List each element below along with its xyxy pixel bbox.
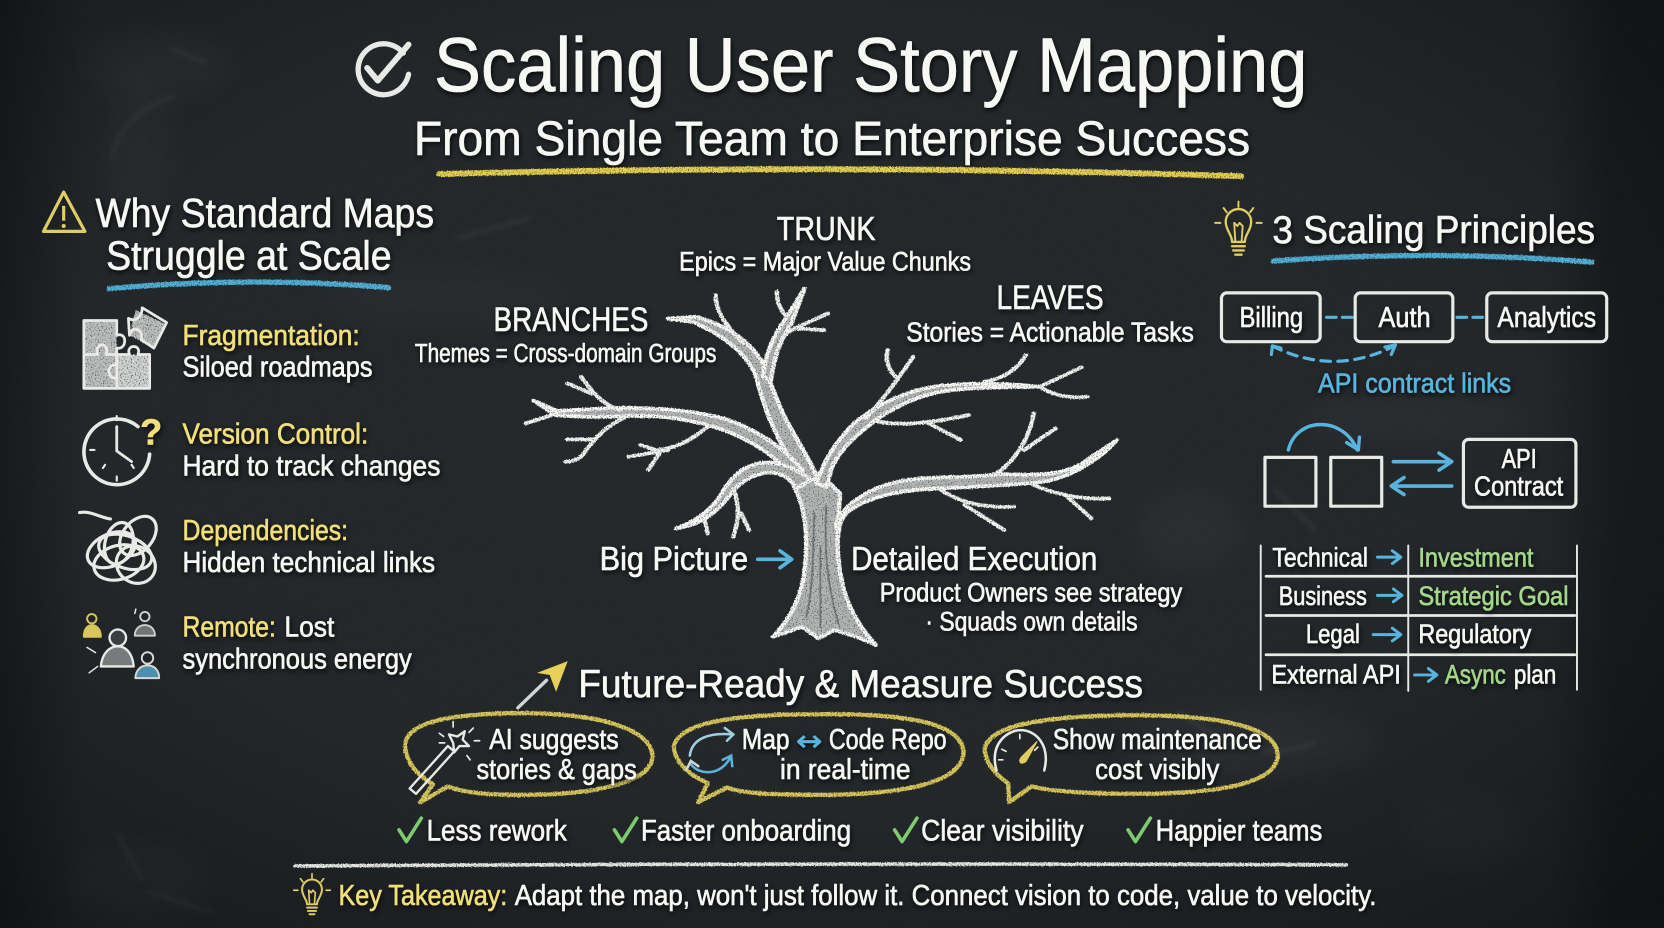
- text: version control: Version Control:: [183, 419, 368, 451]
- panel: why standard maps struggle: [44, 190, 440, 678]
- panel: 3 scaling principles: [1215, 202, 1607, 691]
- mapping table: [1261, 543, 1577, 691]
- title underline: [439, 169, 1242, 176]
- box: api contract: Contract: [1474, 471, 1563, 502]
- text: dependencies: [183, 515, 435, 579]
- panel: future-ready and measure success: [399, 661, 1322, 847]
- label: big picture: Big Picture: [600, 540, 748, 577]
- box: api contract: [1463, 439, 1576, 507]
- text: version control: Hard to track changes: [183, 450, 440, 482]
- text: remote: synchronous energy: [183, 644, 412, 676]
- row: technical: [1272, 543, 1534, 573]
- label: detailed execution: · Squads own details: [925, 606, 1138, 636]
- box: billing: Billing: [1240, 302, 1303, 334]
- label: trunk: [679, 210, 971, 277]
- label: leaves: [906, 279, 1194, 348]
- title block: [358, 22, 1307, 176]
- label: leaves: Stories = Actionable Tasks: [906, 317, 1194, 348]
- icon: clock with question mark: ?: [140, 412, 162, 453]
- callout: maintenance cost: [985, 715, 1278, 802]
- icon: puzzle pieces: [84, 308, 167, 388]
- text: fragmentation: Siloed roadmaps: [183, 352, 372, 384]
- callout: maintenance cost: Show maintenance: [1053, 724, 1262, 756]
- section heading: Why Standard Maps: [96, 190, 434, 236]
- row: legal: Legal: [1306, 619, 1360, 649]
- icon: light bulb: [294, 874, 330, 914]
- arrow: big picture to trunk: [758, 551, 792, 568]
- row: external api: plan: [1514, 659, 1556, 689]
- callout: ai suggests: stories & gaps: [476, 754, 637, 786]
- row: technical: Investment: [1418, 543, 1534, 573]
- icon: gauge: [995, 730, 1046, 770]
- label: detailed execution: Product Owners see strategy: [880, 578, 1183, 608]
- text: remote: Lost: [284, 612, 334, 644]
- icon: remote people: [84, 609, 159, 678]
- box: auth: Auth: [1379, 302, 1431, 334]
- icon: tangled knot: [80, 509, 164, 591]
- text: remote: Remote:: [183, 612, 276, 644]
- row: technical: Technical: [1272, 543, 1368, 573]
- box: auth: [1355, 293, 1453, 342]
- box: analytics: [1487, 293, 1607, 342]
- label: api contract links: API contract links: [1318, 368, 1511, 399]
- box: billing: [1221, 293, 1320, 342]
- label: branches: Themes = Cross-domain Groups: [415, 340, 716, 368]
- dashed connectors: [1327, 316, 1484, 319]
- squares: [1265, 457, 1382, 506]
- heading: Future-Ready & Measure Success: [578, 662, 1143, 706]
- icon: warning triangle: [44, 192, 85, 231]
- label: branches: [415, 301, 716, 368]
- row: external api: Async: [1445, 659, 1506, 689]
- row: legal: Regulatory: [1418, 619, 1532, 649]
- icon: sync arrows: [687, 728, 733, 772]
- text: fragmentation: [183, 320, 372, 384]
- table grid: [1261, 545, 1577, 691]
- label: detailed execution: [851, 540, 1183, 636]
- title: Scaling User Story Mapping: [434, 22, 1307, 108]
- arrow: curved api link: [1271, 345, 1396, 361]
- panel: tree metaphor: [415, 210, 1194, 645]
- heading underline: [109, 282, 388, 289]
- heading underline: [1273, 255, 1592, 262]
- callout: map and code repo: Code Repo: [829, 724, 947, 756]
- text: remote: [183, 612, 412, 676]
- section heading: [96, 190, 434, 279]
- text: dependencies: Hidden technical links: [183, 547, 435, 579]
- callout: map and code repo: ↔: [796, 723, 822, 757]
- takeaway text: Adapt the map, won't just follow it. Connect vision to code, value to velocity.: [515, 880, 1376, 912]
- row: external api: External API: [1271, 659, 1401, 689]
- row: legal: [1306, 619, 1532, 649]
- callout: ai suggests: AI suggests: [489, 724, 619, 756]
- text: dependencies: Dependencies:: [183, 515, 348, 547]
- domain boxes: [1221, 293, 1607, 399]
- label: leaves: LEAVES: [996, 279, 1104, 317]
- icon: rising arrow: [518, 661, 568, 708]
- benefit: happier teams: Happier teams: [1156, 814, 1322, 847]
- box: api contract: API: [1502, 443, 1537, 474]
- callout: map and code repo: Map: [742, 724, 790, 756]
- row: business: Business: [1279, 581, 1367, 611]
- icon: light bulb: [1215, 202, 1262, 255]
- takeaway text: Key Takeaway:: [339, 880, 507, 912]
- api contract diagram: [1265, 424, 1576, 507]
- label: trunk: Epics = Major Value Chunks: [679, 247, 971, 277]
- benefit: faster onboarding: Faster onboarding: [641, 814, 851, 847]
- label: trunk: TRUNK: [777, 210, 876, 247]
- text: version control: [183, 419, 440, 482]
- subtitle: From Single Team to Enterprise Success: [414, 113, 1250, 166]
- arrow: to contract: [1393, 453, 1452, 470]
- row: external api: [1271, 659, 1556, 689]
- icon: check circle: [358, 44, 409, 95]
- arrow: curved loop: [1288, 424, 1359, 450]
- key takeaway: [294, 874, 1376, 914]
- section heading: Struggle at Scale: [106, 233, 392, 279]
- label: detailed execution: Detailed Execution: [851, 540, 1097, 577]
- callout: ai suggests: [405, 713, 653, 802]
- callout: map and code repo: in real-time: [780, 754, 911, 786]
- icon: clock with question mark: [84, 412, 162, 485]
- callout: maintenance cost: cost visibly: [1095, 754, 1220, 786]
- text: fragmentation: Fragmentation:: [183, 320, 360, 352]
- box: analytics: Analytics: [1497, 302, 1596, 334]
- icon: magic wand: [410, 722, 480, 794]
- tree drawing: [526, 288, 1117, 645]
- section heading: 3 Scaling Principles: [1272, 208, 1595, 252]
- arrow: from contract: [1391, 478, 1452, 495]
- label: branches: BRANCHES: [493, 301, 648, 339]
- row: business: [1279, 581, 1568, 611]
- benefit: clear visibility: Clear visibility: [921, 814, 1084, 847]
- benefit: less rework: Less rework: [427, 814, 567, 847]
- row: business: Strategic Goal: [1418, 581, 1568, 611]
- callout: map and code repo: [674, 714, 964, 802]
